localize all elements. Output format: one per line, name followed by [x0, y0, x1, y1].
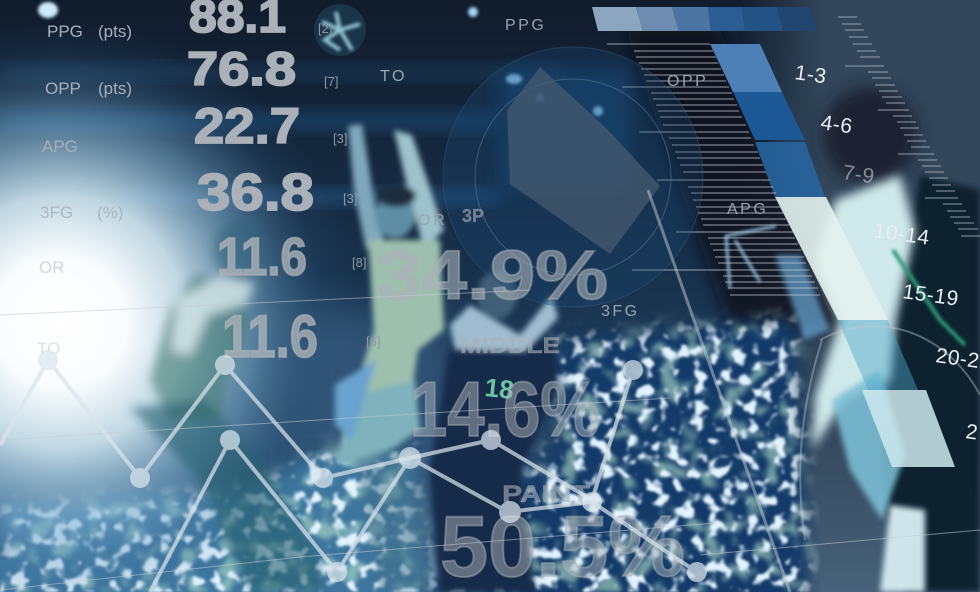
stat labels: APG: [42, 137, 78, 156]
stat labels: PPG: [47, 22, 83, 41]
rank labels: [2]: [318, 21, 332, 36]
radar chart: [443, 47, 703, 307]
left glare: [0, 22, 360, 592]
stat labels: 3FG: [40, 203, 73, 222]
player: right foreground: [775, 87, 980, 592]
stat values: 36.8: [197, 164, 314, 222]
shooting splits: MIDDLE: [460, 333, 560, 358]
player: left defender: [130, 220, 320, 592]
line chart: series two: [150, 430, 707, 592]
radar axis labels: [380, 17, 768, 320]
age range labels: 2: [964, 420, 980, 445]
radar axis labels: 3FG: [601, 303, 640, 320]
age range labels: 10-14: [872, 219, 931, 250]
shooting splits: [376, 206, 685, 592]
shooting splits: 34.9%: [376, 236, 608, 314]
age range labels: [793, 61, 980, 445]
court lines: [0, 190, 980, 592]
rank labels: [3]: [343, 191, 357, 206]
radar axis labels: PPG: [505, 17, 546, 34]
radar axis labels: APG: [727, 201, 768, 218]
top percentile bar: [592, 7, 817, 31]
arena lights: [38, 2, 603, 116]
stat labels: (pts): [98, 22, 132, 41]
player: defender number 18: 18: [483, 372, 515, 405]
stat values: 11.6: [217, 227, 307, 287]
player: defender number 18: [430, 271, 558, 592]
stat labels: OR: [39, 258, 64, 277]
shooting splits: PAINT: [502, 481, 590, 508]
backboard: [726, 226, 776, 288]
age range labels: 20-2: [934, 344, 980, 373]
blue diagonal bar: [710, 44, 955, 467]
rank labels: [7]: [324, 74, 338, 89]
stat labels: (%): [97, 203, 123, 222]
stat labels: OPP: [45, 79, 81, 98]
rank labels: [6]: [366, 334, 380, 349]
age range labels: 15-19: [901, 280, 960, 311]
line chart: series one: [0, 350, 643, 512]
shooting splits: 14.6%: [410, 365, 600, 453]
age range labels: 4-6: [819, 111, 854, 138]
rank labels: [3]: [333, 131, 347, 146]
radar axis labels: TO: [380, 68, 407, 85]
stat values: 76.8: [187, 42, 296, 95]
stat values: [187, 0, 318, 370]
tick ladder: centre: [607, 44, 820, 295]
player: shooter: [335, 124, 444, 592]
rank labels: [8]: [352, 255, 366, 270]
radar axis labels: OPP: [667, 73, 708, 90]
rank labels: [318, 21, 380, 349]
age range labels: 7-9: [841, 161, 876, 188]
ball: [314, 4, 366, 56]
crowd: [0, 300, 820, 592]
stat values: 22.7: [194, 98, 300, 154]
stat values: 11.6: [222, 303, 318, 370]
stat labels: TO: [37, 339, 60, 358]
age range labels: 1-3: [793, 61, 828, 88]
shooting splits: 3P: [462, 206, 484, 226]
tick ladder: right: [838, 17, 980, 236]
stat labels: [37, 22, 132, 358]
stat labels: (pts): [98, 79, 132, 98]
radar axis labels: OR: [418, 212, 447, 229]
